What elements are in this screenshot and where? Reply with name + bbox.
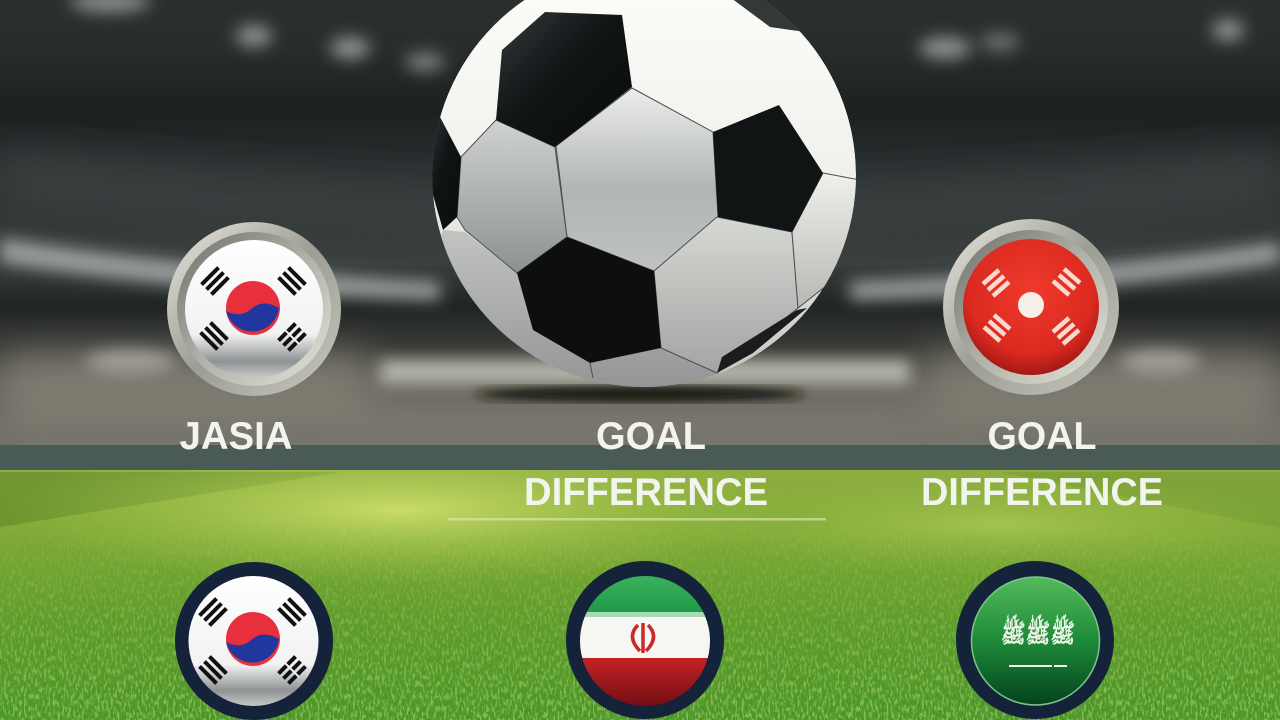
emblem [632, 623, 654, 653]
badge: Iran flag [566, 561, 724, 719]
panel: top right sliver [734, 0, 800, 32]
panel: lower-right [654, 217, 798, 373]
panel: lower right sliver [717, 308, 807, 373]
panel: centre hexagon [556, 88, 718, 271]
label: JASIA: JASIA [180, 415, 292, 458]
sword [1009, 665, 1067, 667]
label: goal centre: GOAL [596, 415, 706, 458]
pitch [0, 435, 1280, 720]
soccer ball [420, 0, 860, 400]
panel: right black [713, 105, 823, 232]
badge: red flag metallic [943, 219, 1119, 395]
panel: lower-left grey [441, 230, 716, 387]
panel: top-left black [496, 12, 632, 147]
soccer ball shadow [475, 386, 805, 402]
script: ﷺﷺﷺ [1001, 613, 1075, 648]
badge: Saudi flag [956, 561, 1114, 719]
panel: left black sliver [432, 117, 461, 230]
label: goal right: GOAL [988, 415, 1096, 458]
badge: South Korea metallic [167, 222, 341, 396]
label: difference centre: DIFFERENCE [524, 471, 768, 514]
panel: bottom black [517, 237, 661, 363]
panel: left grey [457, 120, 567, 273]
stadium background [0, 0, 1280, 450]
label: difference right: DIFFERENCE [921, 471, 1163, 514]
badge: South Korea flag [175, 562, 333, 720]
panel: right white [792, 173, 860, 308]
